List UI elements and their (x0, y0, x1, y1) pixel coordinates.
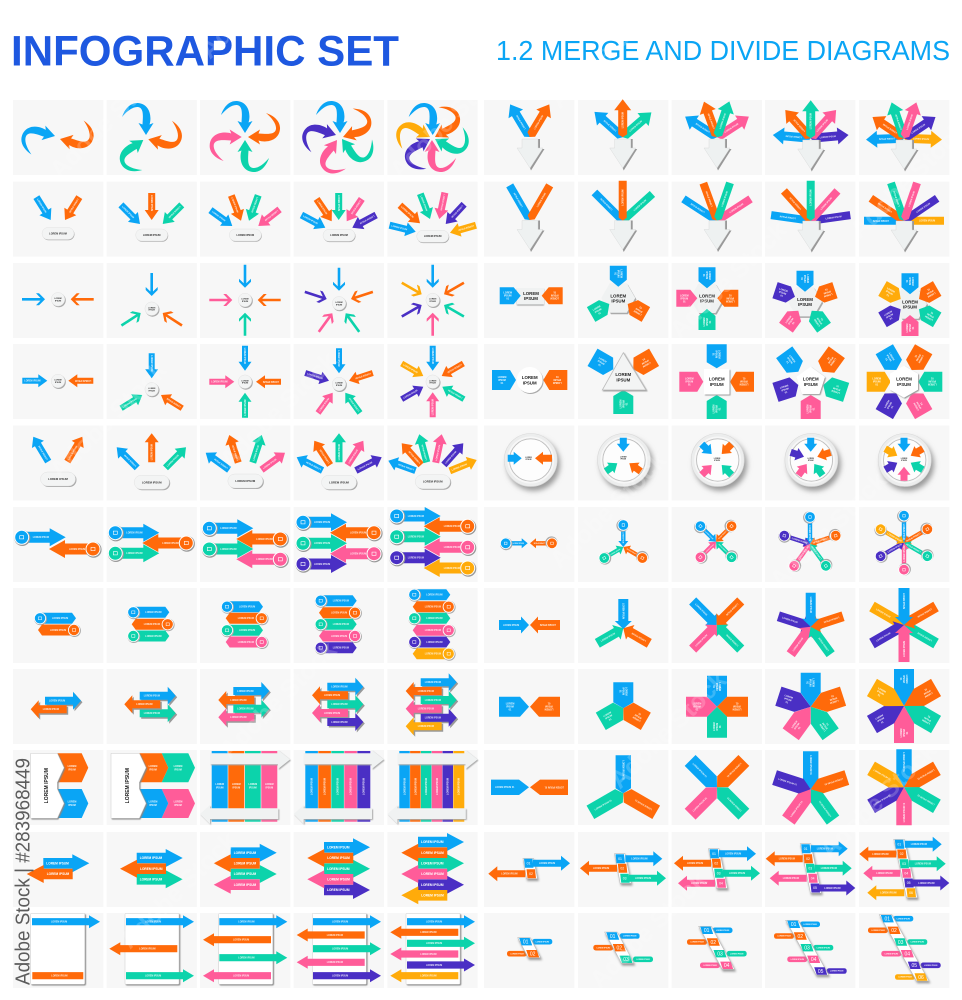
diagonal numbered strip, 2 parts: 02 (530, 952, 536, 958)
block arrows to circle, 4 parts: IPSUM (242, 383, 248, 385)
white panel with arrows, 5 parts (294, 913, 384, 988)
diagonal numbered strip, 5 parts: 01 (791, 922, 797, 928)
meeting arrows, 6 parts (859, 588, 949, 663)
diagonal numbered strip, 4 parts: 02 (711, 940, 716, 946)
white panel with arrows, 3 parts (107, 913, 197, 988)
ring with arrows, 6 parts: LOREM (901, 458, 908, 460)
numbered column with arrows, 5 parts: 01 (804, 847, 808, 851)
numbered column with arrows, 4 parts: 02 (714, 862, 718, 866)
numbered column with arrows, 6 parts: 02 (900, 852, 904, 856)
arrows to pill, 2 parts (13, 182, 103, 257)
chevron panel, 2 parts: IPSUM (68, 768, 76, 772)
triangle with pentagons, 3 parts: LOREM (615, 372, 632, 377)
faint diagonal stock watermarks: Adobe Stock (214, 346, 342, 474)
columns between arrows, 5 parts: LOREM IPSUM (362, 778, 366, 795)
stacked hex labels, 5 parts (294, 588, 384, 663)
columns between arrows, 5 parts: LOREM IPSUM (310, 778, 314, 795)
numbered column with arrows, 4 parts: 03 (717, 872, 721, 876)
curved arrows, 2 parts (13, 100, 103, 175)
bars with down arrow, 5 parts (765, 181, 855, 257)
centre label with pentagons, 3 parts (578, 263, 668, 338)
columns between arrows, 4 parts: LOREM (248, 783, 257, 786)
thin arrows to circle, 5 parts (294, 263, 384, 338)
centre label with pentagons, 6 parts (859, 263, 949, 338)
thin arrows to circle, 3 parts: IPSUM (149, 310, 155, 312)
pentagon with pentagons, 5 parts: IPSUM (804, 382, 818, 387)
centre label with pentagons, 5 parts (765, 263, 855, 338)
numbered column with arrows, 5 parts: 05 (813, 886, 817, 890)
chevron panel, 2 parts: LOREM (68, 800, 76, 804)
diagonal numbered strip, 5 parts: 04 (811, 957, 817, 963)
numbered column with arrows, 5 parts: 02 (806, 857, 810, 861)
faint diagonal stock watermarks: Adobe Stock (604, 666, 732, 794)
diagonal numbered strip, 4 parts (672, 913, 762, 988)
centre label with pentagons, 2 parts: IPSUM (524, 296, 538, 301)
large double arrows, 6 parts (387, 832, 478, 907)
columns between arrows, 4 parts: IPSUM (266, 786, 273, 790)
columns between arrows, 6 parts (387, 750, 478, 825)
chevron panel, 4 parts: IPSUM (174, 768, 182, 772)
centre label with pentagons, 3 parts: IPSUM (611, 298, 626, 304)
diagonal numbered strip, 3 parts: 01 (610, 934, 616, 940)
hexagon with pentagons, 6 parts: IPSUM (897, 382, 911, 387)
block arrows to circle, 4 parts (200, 344, 290, 419)
chevron panel, 2 parts: LOREM (68, 765, 76, 768)
chevron panel, 4 parts: LOREM (149, 765, 157, 768)
columns between arrows, 4 parts (200, 750, 290, 825)
bars with down arrow, 6 parts (859, 182, 949, 257)
faint diagonal stock watermarks: Adobe Stock (44, 56, 172, 184)
icon arrows interlocked, 3 parts (107, 507, 197, 582)
block arrows to circle, 6 parts: IPSUM (430, 383, 436, 385)
columns between arrows, 4 parts: IPSUM (216, 786, 223, 790)
diagonal numbered strip, 4 parts: 03 (717, 952, 723, 958)
icon arrows interlocked, 5 parts (294, 507, 384, 582)
numbered column with arrows, 4 parts (672, 832, 762, 907)
arrows to pill, 3 parts (107, 182, 197, 257)
square with pentagons, 4 parts (672, 344, 762, 419)
diagonal numbered strip, 3 parts: 02 (617, 946, 622, 952)
centre label with pentagons, 2 parts (484, 263, 574, 338)
chevron panel, 2 parts (13, 750, 103, 825)
arrows out of pill, 5 parts: LOREM IPSUM (329, 480, 350, 484)
numbered column with arrows, 4 parts: 01 (712, 852, 716, 856)
sticks with icon circles, 6 parts (859, 507, 949, 582)
ring with arrows, 6 parts (859, 426, 949, 500)
arrows to pill, 2 parts: LOREM IPSUM (49, 232, 67, 235)
block arrows to circle, 6 parts (387, 344, 478, 419)
numbered column with arrows, 3 parts (578, 832, 668, 907)
curved arrows, 3 parts (107, 100, 197, 178)
stacked hex labels, 2 parts (13, 588, 103, 663)
long petals, 5 parts (765, 750, 855, 825)
double arrows stack, 2 parts (13, 669, 103, 744)
block arrows to circle, 3 parts: IPSUM (149, 390, 155, 392)
arrows out of pill, 6 parts: LOREM IPSUM (423, 480, 443, 484)
diagonal numbered strip, 3 parts: 03 (623, 957, 629, 963)
columns between arrows, 5 parts: LOREM IPSUM (350, 778, 352, 795)
block arrows to circle, 6 parts: LOREM (429, 380, 437, 382)
faint diagonal stock watermarks: Adobe Stock (44, 356, 172, 484)
arrows out of pill, 3 parts: LOREM IPSUM (142, 480, 162, 484)
arrows to pill, 4 parts: LOREM IPSUM (236, 234, 254, 237)
triangle with pentagons, 3 parts: IPSUM (616, 378, 631, 382)
pentagon petals, 3 parts (578, 669, 668, 744)
thin arrows to circle, 4 parts: IPSUM (242, 301, 248, 303)
diagonal numbered strip, 4 parts: 01 (704, 928, 710, 934)
thin arrows to circle, 2 parts (13, 263, 103, 338)
centre label with pentagons, 4 parts: LOREM (699, 294, 715, 298)
diagonal numbered strip, 4 parts: 04 (724, 963, 730, 969)
columns between arrows, 4 parts: IPSUM (233, 786, 240, 790)
columns between arrows, 6 parts: LOREM IPSUM (447, 778, 450, 795)
columns between arrows, 6 parts: LOREM IPSUM (458, 778, 460, 795)
ring with arrows, 4 parts (672, 426, 762, 500)
centre label with pentagons, 6 parts: IPSUM (903, 304, 917, 310)
columns between arrows, 4 parts: LOREM (265, 783, 274, 786)
columns between arrows, 6 parts: LOREM IPSUM (404, 778, 406, 795)
faint diagonal stock watermarks: Adobe Stock (544, 446, 672, 574)
circle with pentagons, 2 parts: LOREM (522, 375, 538, 380)
chevron panel, 4 parts: IPSUM (149, 804, 157, 807)
faint diagonal stock watermarks: Adobe Stock (384, 56, 512, 184)
numbered column with arrows, 6 parts: 03 (902, 862, 906, 866)
faint diagonal stock watermarks: Adobe Stock (664, 216, 792, 344)
circle with pentagons, 2 parts: IPSUM (523, 380, 537, 386)
long petals, 4 parts (672, 750, 762, 825)
meeting arrows, 2 parts (484, 588, 574, 663)
diagonal numbered strip, 6 parts: 03 (898, 940, 904, 946)
columns between arrows, 5 parts: LOREM IPSUM (324, 778, 326, 795)
diagonal numbered strip, 5 parts: 02 (798, 934, 803, 940)
numbered column with arrows, 6 parts: 01 (897, 842, 901, 846)
block arrows to circle, 5 parts: LOREM (335, 383, 343, 385)
faint diagonal stock watermarks: Adobe Stock (814, 736, 942, 864)
stock id watermark: Adobe Stock | #283968449 (12, 758, 34, 985)
fan arrows with down arrow, 3 parts (578, 99, 668, 175)
fan arrows with down arrow, 2 parts (484, 100, 574, 175)
block arrows to circle, 5 parts (294, 344, 384, 419)
chevron panel, 4 parts: IPSUM (174, 804, 182, 807)
chevron panel, 4 parts (107, 750, 197, 825)
thin arrows to circle, 4 parts (200, 263, 290, 338)
columns between arrows, 6 parts: LOREM IPSUM (436, 778, 439, 795)
diagonal numbered strip, 2 parts: 01 (523, 940, 529, 946)
thin arrows to circle, 2 parts: IPSUM (55, 300, 61, 302)
arrows out of pill, 2 parts: LOREM IPSUM (48, 477, 69, 481)
numbered column with arrows, 6 parts: 06 (909, 891, 913, 895)
numbered column with arrows, 6 parts (859, 832, 949, 907)
icon arrows interlocked, 2 parts (13, 507, 103, 582)
block arrows to circle, 2 parts: LOREM (54, 380, 62, 382)
ring with arrows, 3 parts: IPSUM (620, 459, 627, 461)
white panel with arrows, 4 parts (200, 913, 290, 988)
ring with arrows, 4 parts: LOREM (714, 458, 721, 460)
chevron panel, 2 parts: LOREM IPSUM (44, 768, 50, 803)
bars with down arrow, 3 parts (578, 181, 668, 257)
sticks with icon circles, 2 parts (484, 507, 574, 582)
large double arrows, 3 parts (107, 832, 197, 907)
white panel with arrows, 6 parts (387, 913, 478, 988)
centre label with pentagons, 4 parts (672, 263, 762, 338)
thin arrows to circle, 6 parts: LOREM (429, 299, 437, 301)
arrows out of pill, 2 parts (13, 426, 103, 500)
stacked hex labels, 4 parts (200, 588, 290, 663)
triangle with pentagons, 3 parts (578, 344, 668, 419)
long petals, 6 parts (859, 749, 949, 825)
arrows out of pill, 5 parts (294, 426, 385, 500)
pentagon petals, 2 parts (484, 669, 574, 744)
long petals, 2 parts (484, 750, 574, 825)
columns between arrows, 6 parts: LOREM IPSUM (414, 778, 417, 795)
diagonal numbered strip, 5 parts: 05 (818, 969, 824, 975)
hexagon with pentagons, 6 parts: LOREM (896, 376, 912, 382)
ring with arrows, 2 parts: IPSUM (526, 459, 532, 461)
double arrows stack, 3 parts (107, 669, 197, 744)
centre label with pentagons, 5 parts: LOREM (797, 297, 813, 302)
columns between arrows, 4 parts: IPSUM (249, 786, 257, 790)
large double arrows, 4 parts (200, 832, 290, 907)
pentagon petals, 6 parts (859, 669, 949, 744)
block arrows to circle, 2 parts (13, 344, 103, 419)
ring with arrows, 3 parts (578, 426, 668, 500)
numbered column with arrows, 5 parts: 04 (811, 876, 815, 880)
block arrows to circle, 3 parts: LOREM (148, 388, 156, 390)
arrows to pill, 6 parts: LOREM IPSUM (424, 235, 442, 238)
bars with down arrow, 2 parts (484, 182, 574, 257)
double arrows stack, 6 parts (387, 669, 478, 744)
arrows to pill, 6 parts (387, 182, 478, 257)
double arrows stack, 5 parts (294, 669, 384, 744)
large double arrows, 2 parts (13, 832, 103, 907)
centre label with pentagons, 5 parts: IPSUM (798, 302, 812, 307)
meeting arrows, 5 parts (765, 588, 855, 663)
pentagon with pentagons, 5 parts (765, 344, 855, 419)
block arrows to circle, 5 parts: IPSUM (336, 385, 342, 387)
arrows out of pill, 3 parts (107, 426, 197, 500)
numbered column with arrows, 6 parts: 05 (907, 881, 911, 885)
diagonal numbered strip, 6 parts: 06 (918, 975, 924, 981)
diagonal numbered strip, 6 parts: 04 (905, 952, 910, 958)
chevron panel, 4 parts: LOREM (174, 800, 182, 804)
ring with arrows, 5 parts (765, 426, 855, 500)
icon arrows interlocked, 6 parts (387, 507, 478, 582)
thin arrows to circle, 3 parts (107, 263, 197, 338)
diagonal numbered strip, 3 parts (578, 913, 668, 988)
circle with pentagons, 2 parts (484, 344, 574, 419)
sticks with icon circles, 4 parts (672, 507, 762, 582)
columns between arrows, 4 parts: LOREM (232, 783, 241, 786)
numbered column with arrows, 2 parts (484, 832, 574, 907)
long petals, 3 parts (578, 750, 668, 825)
diagonal numbered strip, 6 parts (859, 913, 949, 988)
faint diagonal stock watermarks: Adobe Stock (214, 636, 342, 764)
large double arrows, 5 parts (294, 832, 384, 907)
meeting arrows, 4 parts (672, 588, 762, 663)
numbered column with arrows, 6 parts: 04 (904, 872, 908, 876)
thin arrows to circle, 6 parts (387, 263, 478, 338)
curved arrows, 5 parts (294, 100, 384, 180)
thin arrows to circle, 5 parts: LOREM (335, 302, 343, 304)
numbered column with arrows, 5 parts (765, 832, 855, 907)
ring with arrows, 5 parts: IPSUM (808, 460, 814, 462)
centre label with pentagons, 6 parts: LOREM (902, 300, 918, 304)
diagonal numbered strip, 6 parts: 01 (885, 916, 890, 922)
diagonal numbered strip, 2 parts (484, 913, 574, 988)
stacked hex labels, 6 parts (387, 588, 478, 663)
chevron panel, 4 parts: LOREM (149, 800, 157, 804)
sticks with icon circles, 5 parts (765, 507, 855, 582)
arrows out of pill, 6 parts (386, 426, 479, 500)
pentagon petals, 4 parts (672, 669, 762, 744)
block arrows to circle, 2 parts: IPSUM (55, 382, 61, 384)
diagonal numbered strip, 5 parts (765, 913, 855, 988)
square with pentagons, 4 parts: IPSUM (710, 382, 724, 387)
sticks with icon circles, 3 parts (578, 507, 668, 582)
numbered column with arrows, 4 parts: 04 (719, 882, 723, 886)
white panel with arrows, 2 parts (13, 913, 103, 988)
numbered column with arrows, 5 parts: 03 (808, 866, 812, 870)
numbered column with arrows, 3 parts: 01 (618, 857, 622, 861)
columns between arrows, 6 parts: LOREM IPSUM (425, 778, 428, 795)
numbered column with arrows, 2 parts: 02 (529, 872, 533, 876)
ring with arrows, 5 parts: LOREM (807, 458, 814, 460)
faint diagonal stock watermarks: Adobe Stock (114, 826, 242, 954)
fan arrows with down arrow, 4 parts (672, 99, 762, 175)
diagonal numbered strip, 6 parts: 05 (912, 963, 917, 969)
ring with arrows, 2 parts (484, 426, 574, 500)
thin arrows to circle, 6 parts: IPSUM (430, 301, 436, 303)
fan arrows with down arrow, 6 parts (859, 100, 949, 175)
ring with arrows, 2 parts: LOREM (525, 457, 532, 459)
block arrows to circle, 4 parts: LOREM (241, 380, 249, 382)
numbered column with arrows, 2 parts: 01 (527, 862, 530, 866)
arrows to pill, 4 parts (200, 182, 290, 257)
meeting arrows, 3 parts (578, 588, 668, 663)
arrows to pill, 5 parts: LOREM IPSUM (330, 234, 348, 237)
chevron panel, 4 parts: LOREM (174, 765, 182, 768)
thin arrows to circle, 2 parts: LOREM (54, 298, 62, 300)
chevron panel, 4 parts: IPSUM (149, 768, 157, 772)
numbered column with arrows, 3 parts: 03 (623, 876, 627, 880)
thin arrows to circle, 3 parts: LOREM (148, 307, 156, 309)
arrows out of pill, 4 parts: LOREM IPSUM (235, 479, 256, 483)
columns between arrows, 5 parts: LOREM IPSUM (336, 778, 340, 795)
stacked hex labels, 3 parts (107, 588, 197, 663)
arrows to pill, 3 parts: LOREM IPSUM (143, 234, 161, 237)
title: INFOGRAPHIC SET (11, 28, 399, 76)
faint diagonal stock watermarks: Adobe Stock (764, 466, 892, 594)
centre label with pentagons, 2 parts: LOREM (523, 291, 539, 296)
chevron panel, 2 parts: IPSUM (68, 804, 76, 807)
hexagon with pentagons, 6 parts (859, 344, 949, 419)
ring with arrows, 4 parts: IPSUM (714, 460, 720, 462)
square with pentagons, 4 parts: LOREM (709, 376, 725, 382)
numbered column with arrows, 3 parts: 02 (620, 866, 624, 870)
icon arrows interlocked, 4 parts (200, 507, 290, 582)
columns between arrows, 4 parts: LOREM (215, 783, 224, 786)
faint diagonal stock watermarks: Adobe Stock (584, 866, 712, 994)
columns between arrows, 5 parts (294, 750, 384, 825)
bars with down arrow, 4 parts (672, 182, 762, 257)
curved arrows, 4 parts (200, 100, 290, 175)
ring with arrows, 3 parts: LOREM (620, 456, 627, 458)
thin arrows to circle, 5 parts: IPSUM (336, 304, 342, 306)
subtitle: 1.2 MERGE AND DIVIDE DIAGRAMS (496, 35, 950, 66)
thin arrows to circle, 4 parts: LOREM (241, 299, 249, 301)
arrows out of pill, 4 parts (200, 426, 290, 500)
centre label with pentagons, 4 parts: IPSUM (700, 298, 714, 304)
arrows to pill, 5 parts (294, 182, 384, 257)
centre label with pentagons, 3 parts: LOREM (610, 294, 627, 298)
curved arrows, 6 parts (387, 100, 478, 176)
pentagon with pentagons, 5 parts: LOREM (803, 376, 819, 382)
chevron panel, 4 parts: LOREM IPSUM (125, 768, 131, 803)
diagonal numbered strip, 6 parts: 02 (891, 928, 897, 934)
fan arrows with down arrow, 5 parts (765, 100, 855, 175)
diagonal numbered strip, 5 parts: 03 (804, 946, 810, 952)
block arrows to circle, 3 parts (107, 344, 197, 419)
ring with arrows, 6 parts: IPSUM (901, 460, 907, 462)
double arrows stack, 4 parts (200, 669, 290, 744)
pentagon petals, 5 parts (765, 669, 855, 744)
